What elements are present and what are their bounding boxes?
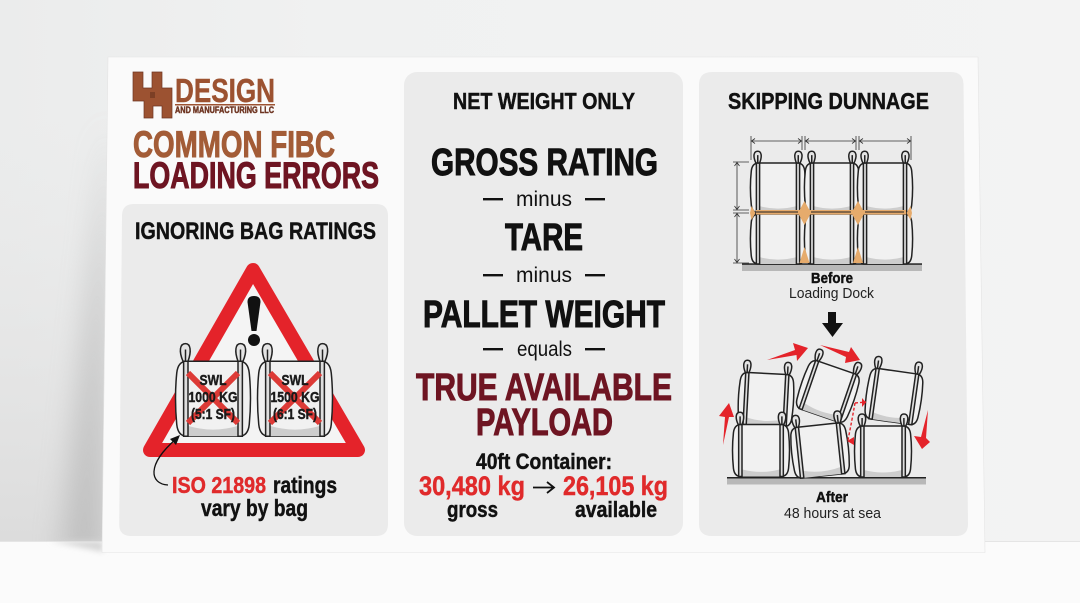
example: 40ft container: 30,480 kg bbox=[419, 471, 525, 501]
logo: HH Design and Manufacturing: AND MANUFACTURING LLC bbox=[175, 105, 274, 115]
diagram: after, shifted bags bbox=[719, 343, 930, 484]
example: 40ft container: available bbox=[575, 497, 657, 522]
callout: ISO 21898 ratings vary by bag: ISO 21898 bbox=[172, 472, 266, 498]
arrow: gross to available bbox=[533, 482, 554, 493]
title: COMMON FIBC bbox=[133, 124, 335, 165]
bags: two rows of three bbox=[750, 151, 913, 264]
example: 40ft container: 26,105 kg bbox=[563, 471, 668, 501]
arrows: red shift arrows bbox=[719, 343, 930, 449]
operator: minus: minus bbox=[516, 264, 572, 287]
arrow: before to after bbox=[822, 312, 843, 337]
bag: SWL 1000 kg: (5:1 SF) bbox=[191, 406, 235, 423]
caption: after: After bbox=[816, 489, 848, 506]
wall and floor background bbox=[0, 133, 1080, 603]
bag: SWL 1500 kg bbox=[258, 344, 332, 436]
equation: tare: TARE bbox=[505, 217, 583, 259]
result: true available payload: PAYLOAD bbox=[476, 402, 613, 444]
equation: gross rating: GROSS RATING bbox=[431, 142, 658, 184]
example: 40ft container: gross bbox=[447, 497, 498, 522]
operator: equals: equals bbox=[517, 338, 572, 361]
result: true available payload: TRUE AVAILABLE bbox=[416, 367, 672, 409]
callout: ISO 21898 ratings vary by bag bbox=[172, 472, 337, 521]
callout: ISO 21898 ratings vary by bag: ratings bbox=[273, 472, 337, 498]
caption: after bbox=[784, 489, 882, 522]
operator: minus bbox=[483, 188, 605, 211]
example: 40ft container: 40ft Container: bbox=[476, 449, 612, 474]
callout: ISO 21898 ratings vary by bag: vary by bag bbox=[201, 495, 308, 521]
title: LOADING ERRORS bbox=[133, 155, 379, 196]
poster card bbox=[102, 57, 985, 552]
bag: SWL 1500 kg: SWL bbox=[282, 372, 308, 389]
caption: before: Before bbox=[811, 270, 853, 287]
arrow: curved pointer to bag bbox=[154, 435, 180, 485]
operator: minus: minus bbox=[516, 188, 572, 211]
panel: net weight only bbox=[404, 72, 683, 536]
panel: skipping dunnage bbox=[699, 72, 968, 536]
bag: SWL 1000 kg: SWL bbox=[200, 372, 226, 389]
diagram: before, neatly stacked bags bbox=[733, 136, 922, 271]
floor bbox=[742, 263, 922, 271]
dunnage fill at bag joins bbox=[750, 201, 912, 263]
logo: HH Design and Manufacturing bbox=[133, 72, 275, 118]
heading: ignoring bag ratings: IGNORING BAG RATINGS bbox=[135, 218, 376, 245]
logo: HH Design and Manufacturing: DESIGN bbox=[175, 72, 275, 109]
bags: collapsed stack bbox=[732, 347, 926, 479]
bag: SWL 1000 kg: 1000 KG bbox=[188, 389, 238, 406]
heading: net weight only: NET WEIGHT ONLY bbox=[453, 88, 635, 114]
dimension lines bbox=[733, 136, 911, 263]
bag: SWL 1500 kg: 1500 KG bbox=[270, 389, 320, 406]
caption: before bbox=[789, 270, 874, 302]
operator: equals bbox=[483, 338, 605, 361]
floor bbox=[727, 477, 926, 484]
caption: before: Loading Dock bbox=[789, 285, 874, 302]
operator: minus bbox=[483, 264, 605, 287]
icon: exclamation mark bbox=[248, 296, 260, 346]
heading: skipping dunnage: SKIPPING DUNNAGE bbox=[728, 88, 929, 114]
equation: pallet weight: PALLET WEIGHT bbox=[423, 294, 665, 336]
panel: ignoring bag ratings bbox=[119, 204, 388, 536]
example: 40ft container bbox=[419, 449, 668, 522]
caption: after: 48 hours at sea bbox=[784, 505, 882, 522]
bag: SWL 1000 kg bbox=[176, 344, 250, 436]
icon: warning triangle bbox=[150, 270, 358, 450]
bag: SWL 1500 kg: (6:1 SF) bbox=[273, 406, 317, 423]
result: true available payload bbox=[416, 367, 672, 444]
title bbox=[133, 124, 379, 196]
